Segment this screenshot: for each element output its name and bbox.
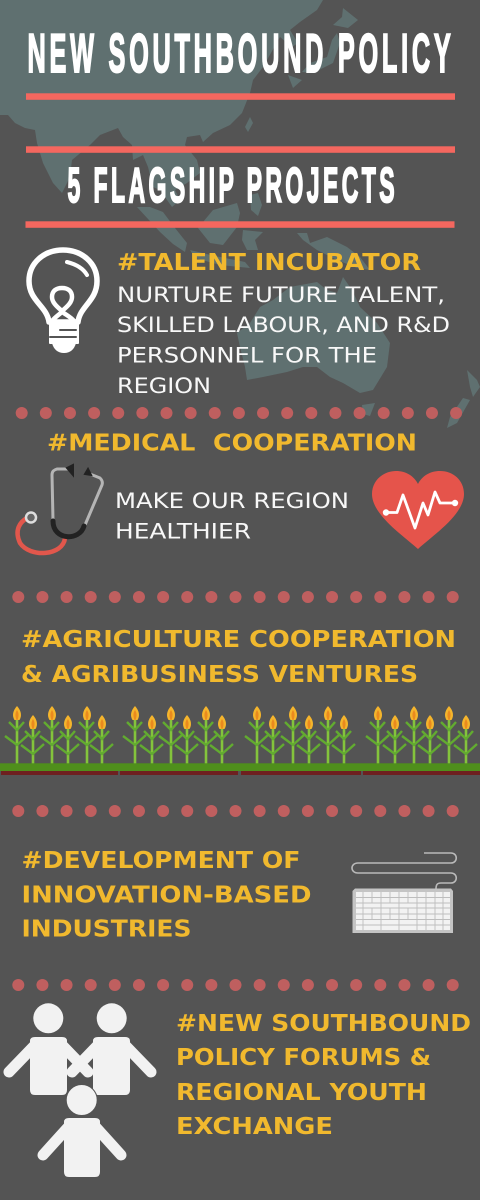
title: NEW SOUTHBOUND POLICY: [28, 23, 451, 85]
heading: forums and youth exchange: [176, 1009, 471, 1140]
panel: forums and youth exchange: [9, 1003, 471, 1177]
panel: talent incubator: [29, 248, 450, 399]
subtitle: 5 FLAGSHIP PROJECTS: [68, 158, 395, 214]
panel: medical cooperation: [18, 428, 464, 553]
heading: agriculture cooperation: [21, 625, 456, 688]
icon: stethoscope: [18, 465, 102, 553]
heading: talent incubator: #TALENT INCUBATOR: [117, 248, 421, 276]
heading: forums and youth exchange: EXCHANGE: [176, 1112, 333, 1140]
dotted divider 3: [12, 805, 459, 817]
subtitle lower rule: [26, 221, 454, 228]
heading: innovation-based industries: INNOVATION-BASED: [22, 880, 312, 908]
heading: innovation-based industries: #DEVELOPMENT OF: [22, 846, 300, 874]
person right: [72, 1003, 151, 1095]
heading: forums and youth exchange: #NEW SOUTHBOUND: [176, 1009, 471, 1037]
text: medical description: HEALTHIER: [115, 520, 251, 545]
title rule: [26, 93, 455, 100]
panel: innovation-based industries: [22, 846, 456, 942]
person front: [43, 1084, 121, 1177]
heading: agriculture cooperation: #AGRICULTURE COOPERATION: [21, 625, 456, 653]
text: talent description: [117, 283, 450, 399]
heading: agriculture cooperation: & AGRIBUSINESS VENTURES: [21, 660, 418, 688]
icon: corn field: [0, 706, 480, 775]
text: talent description: REGION: [117, 374, 211, 399]
heading: innovation-based industries: [22, 846, 312, 942]
person left: [9, 1003, 88, 1095]
text: talent description: PERSONNEL FOR THE: [117, 344, 377, 369]
heading: forums and youth exchange: POLICY FORUMS &: [176, 1043, 431, 1071]
heading: medical cooperation: #MEDICAL COOPERATION: [47, 428, 417, 456]
panel: agriculture cooperation: [0, 625, 480, 775]
icon: keyboard: [352, 853, 456, 933]
text: talent description: NURTURE FUTURE TALENT,: [117, 283, 445, 308]
dotted divider 4: [12, 979, 459, 991]
dotted divider 1: [16, 407, 462, 419]
icon: light bulb: [29, 250, 97, 352]
text: medical description: MAKE OUR REGION: [115, 489, 349, 514]
icon: heart with pulse: [372, 471, 464, 549]
subtitle rule: [26, 146, 455, 153]
background map of Asia-Pacific: [0, 0, 480, 428]
icon: three people: [9, 1003, 151, 1177]
dotted divider 2: [12, 591, 459, 603]
text: medical description: [115, 489, 349, 545]
heading: forums and youth exchange: REGIONAL YOUTH: [176, 1078, 427, 1106]
text: talent description: SKILLED LABOUR, AND R&D: [117, 313, 450, 338]
heading: innovation-based industries: INDUSTRIES: [22, 914, 192, 942]
